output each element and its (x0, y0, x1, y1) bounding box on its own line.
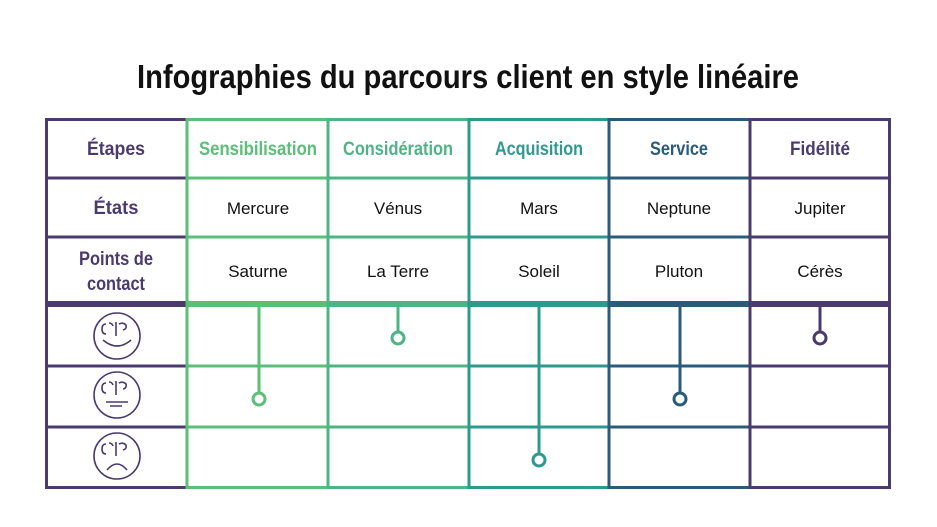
panel: Fidélité column: Cérès (797, 262, 843, 281)
title: Infographies du parcours client en style linéaire (137, 58, 799, 95)
label texts: Points de (79, 249, 153, 270)
panel: Considération column: Vénus (374, 199, 422, 218)
panel: Considération column (328, 120, 469, 488)
panel: Fidélité column: Jupiter (794, 199, 846, 218)
icon: sad face (94, 433, 140, 479)
label texts: États (94, 197, 138, 219)
panel: Sensibilisation column (187, 120, 328, 488)
panel: Sensibilisation column: Mercure (227, 199, 289, 218)
panel: Considération column: La Terre (367, 262, 429, 281)
panel: Acquisition column: Acquisition (495, 139, 583, 160)
panel: Acquisition column: Mars (520, 199, 558, 218)
panel: Sensibilisation column: Saturne (228, 262, 288, 281)
panel: Acquisition column: Soleil (518, 262, 560, 281)
panel: Sensibilisation column: Sensibilisation (199, 139, 317, 160)
panel: Service column: Pluton (655, 262, 703, 281)
panel: label column (45, 120, 187, 488)
label texts (79, 138, 153, 295)
panel: Service column (609, 120, 750, 488)
panel: Service column: Neptune (647, 199, 711, 218)
label texts: contact (87, 274, 146, 295)
panel: Fidélité column: Fidélité (790, 139, 850, 160)
panel: Considération column: Considération (343, 139, 453, 160)
panel: Fidélité column (750, 120, 891, 488)
label texts: Étapes (87, 138, 145, 160)
icon: happy face (94, 313, 140, 359)
panel: Acquisition column (469, 120, 609, 488)
panel: Service column: Service (650, 139, 708, 160)
icon: neutral face (94, 372, 140, 418)
